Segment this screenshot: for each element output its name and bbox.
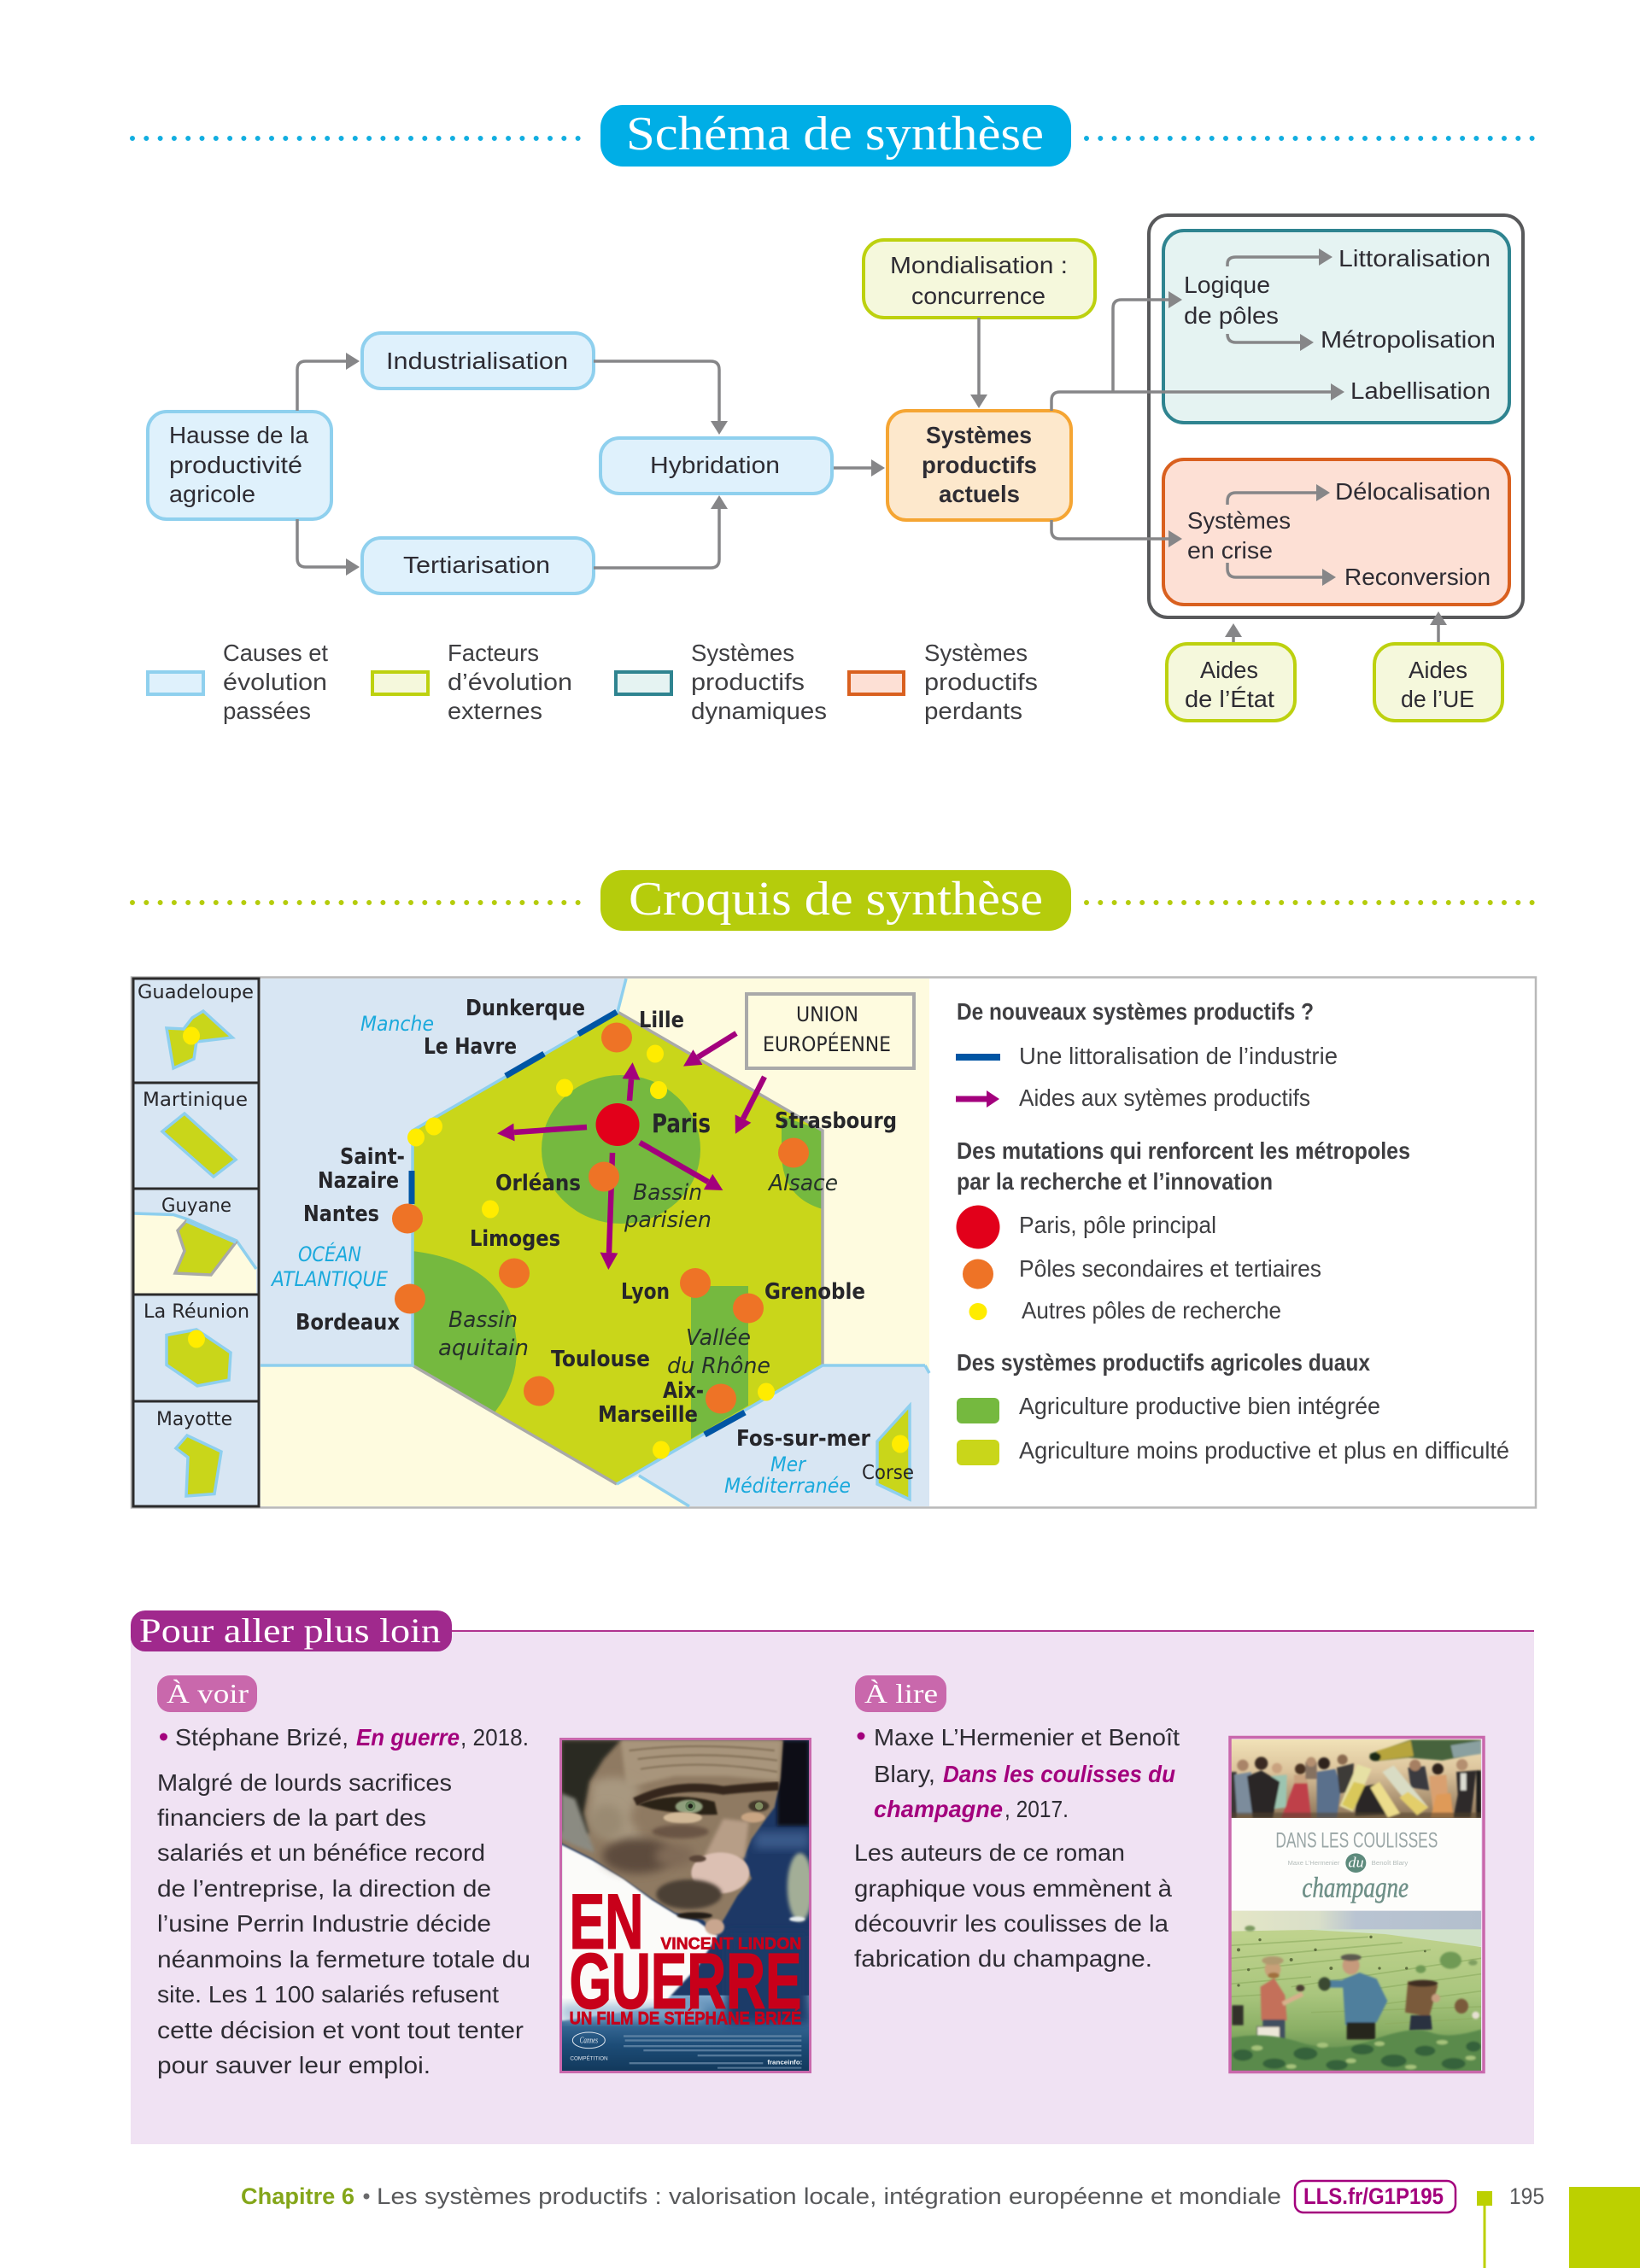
- map labels: cities: Saint-: [340, 1144, 405, 1170]
- map labels: agricultural regions: Bassin: [633, 1180, 702, 1206]
- legend item: losing systems: productifs: [924, 669, 1038, 695]
- book reference: , 2017.: [1004, 1796, 1069, 1822]
- outer frame: current systems: [1149, 215, 1523, 617]
- poster: En guerre: Cannes: [580, 2037, 598, 2046]
- legend item: losing systems: [849, 640, 1038, 724]
- heading: Schéma de synthèse: Schéma de synthèse: [626, 108, 1044, 161]
- film summary: pour sauver leur emploi.: [157, 2052, 430, 2078]
- map: France: [261, 979, 929, 1506]
- book summary: Les auteurs de ce roman: [854, 1839, 1125, 1866]
- box: Hausse de la productivité agricole: productivité: [169, 452, 302, 478]
- map labels: cities: Corse: [862, 1462, 914, 1484]
- map labels: cities: Le Havre: [424, 1034, 517, 1060]
- book summary: fabrication du champagne.: [854, 1945, 1152, 1972]
- map labels: cities: Strasbourg: [775, 1108, 897, 1134]
- poles: secondary and tertiary: [392, 1023, 809, 1414]
- map labels: agricultural regions: Vallée: [686, 1325, 751, 1351]
- inset: Martinique: Martinique: [143, 1090, 248, 1111]
- box: Systèmes productifs actuels: Systèmes: [926, 422, 1032, 448]
- box: Tertiarisation: Tertiarisation: [403, 552, 550, 578]
- arrows: right part of the flow: [979, 300, 1438, 644]
- film reference: En guerre: [356, 1724, 460, 1751]
- sea: Atlantic and Channel: [261, 979, 626, 1365]
- inset: La Réunion: [144, 1301, 249, 1386]
- inset: Mayotte: [156, 1409, 232, 1496]
- tag: À lire: [855, 1675, 946, 1712]
- map labels: cities: [296, 996, 914, 1484]
- legend item: dynamic systems: Systèmes: [691, 640, 794, 666]
- box: Union européenne: UNION: [796, 1002, 858, 1026]
- film reference: Stéphane Brizé,: [175, 1724, 348, 1751]
- panel: dynamic systems: [1163, 231, 1509, 423]
- map labels: seas: Mer: [770, 1453, 807, 1476]
- book cover: Dans les coulisses du champagne: Maxe L’Hermenier: [1288, 1859, 1340, 1867]
- sea: Mediterranean: [617, 1365, 929, 1506]
- inset: Guyane: [161, 1195, 236, 1275]
- face: [561, 1740, 783, 1934]
- box: Union européenne: [747, 994, 914, 1068]
- legend item: aid arrow: Aides aux sytèmes productifs: [1019, 1084, 1310, 1111]
- legend heading: Des systèmes productifs agricoles duaux: [957, 1349, 1370, 1376]
- legend item: external factors: Facteurs: [448, 640, 539, 666]
- footer: chapter title: Chapitre 6: [241, 2183, 354, 2209]
- legend item: Paris: [957, 1206, 1216, 1248]
- tag: À lire: À lire: [864, 1678, 938, 1709]
- footer: [241, 2181, 1640, 2268]
- book reference: [858, 1724, 1180, 1822]
- box: Aides de l'UE: [1374, 644, 1502, 721]
- box: Aides de l'UE: Aides: [1409, 657, 1467, 683]
- map labels: cities: Lyon: [621, 1279, 670, 1305]
- champagne glasses: [1339, 1764, 1372, 1812]
- map labels: cities: Dunkerque: [466, 996, 585, 1021]
- heading: Pour aller plus loin: Pour aller plus loin: [139, 1611, 441, 1650]
- poster: En guerre: VINCENT LINDON: [660, 1935, 801, 1953]
- heading: Croquis de synthèse: [132, 870, 1534, 931]
- panel: systems in crisis: Délocalisation: [1335, 478, 1491, 505]
- book cover: Dans les coulisses du champagne: du: [1348, 1855, 1364, 1871]
- hair: [561, 1740, 621, 1838]
- box: Union européenne: EUROPÉENNE: [763, 1032, 891, 1056]
- panel: dynamic systems: Métropolisation: [1321, 326, 1496, 353]
- map labels: seas: Manche: [360, 1012, 434, 1036]
- film reference: , 2018.: [460, 1724, 529, 1751]
- coastal industry lines: [412, 1012, 745, 1435]
- panel: dynamic systems: Littoralisation: [1338, 245, 1491, 272]
- panel: systems in crisis: Reconversion: [1344, 564, 1491, 590]
- book summary: [854, 1839, 1172, 1972]
- land: hexagon: [413, 1012, 823, 1484]
- map labels: agricultural regions: Alsace: [767, 1171, 838, 1196]
- agriculture: Vallée du Rhône: [691, 1286, 748, 1439]
- heading: Schéma de synthèse: [132, 105, 1534, 167]
- panel: systems in crisis: en crise: [1187, 537, 1273, 564]
- poster: En guerre: [560, 1739, 813, 2072]
- heading: Croquis de synthèse: Croquis de synthèse: [629, 873, 1043, 926]
- inset: Guadeloupe: [138, 982, 254, 1068]
- footer: corner block: [1569, 2187, 1640, 2268]
- map labels: cities: Bordeaux: [296, 1310, 400, 1336]
- map labels: seas: [270, 1012, 851, 1498]
- arrows: left part of the flow: [297, 361, 873, 568]
- footer: link badge: LLS.fr/G1P195: [1303, 2183, 1444, 2209]
- legend heading: De nouveaux systèmes productifs ?: [957, 998, 1314, 1025]
- box: Hausse de la productivité agricole: agricole: [169, 481, 255, 507]
- map labels: cities: Nantes: [303, 1201, 379, 1227]
- worker centre: [1343, 1973, 1387, 2025]
- agriculture: Alsace: [782, 1116, 823, 1209]
- box: Industrialisation: [362, 333, 594, 389]
- legend item: losing systems: perdants: [924, 698, 1022, 724]
- map labels: seas: Méditerranée: [724, 1474, 851, 1498]
- map legend: [956, 998, 1509, 1465]
- box: Industrialisation: Industrialisation: [386, 348, 568, 374]
- legend item: secondary poles: [963, 1255, 1321, 1289]
- panel: dynamic systems: Labellisation: [1350, 377, 1491, 404]
- legend item: causes: évolution: [223, 669, 327, 695]
- crowd: [1231, 1739, 1481, 1818]
- book summary: graphique vous emmènent à: [854, 1875, 1172, 1902]
- legend heading: [957, 1137, 1410, 1195]
- white collar: [561, 1844, 718, 2021]
- inset: Guadeloupe: Guadeloupe: [138, 982, 254, 1003]
- film summary: de l’entreprise, la direction de: [157, 1875, 491, 1902]
- legend item: external factors: externes: [448, 698, 542, 724]
- box: Systèmes productifs actuels: [887, 411, 1071, 520]
- film summary: [157, 1769, 530, 2078]
- map frame: [132, 977, 1536, 1508]
- brows and eyes: [635, 1786, 779, 1802]
- film summary: salariés et un bénéfice record: [157, 1839, 485, 1866]
- legend item: secondary poles: Pôles secondaires et tertiaires: [1019, 1255, 1321, 1282]
- film summary: néanmoins la fermeture totale du: [157, 1946, 530, 1973]
- poster title: EN: [570, 1879, 643, 1965]
- map labels: cities: Marseille: [598, 1402, 698, 1428]
- box: Mondialisation: [864, 240, 1095, 318]
- lower blue fade: [561, 1996, 809, 2071]
- agriculture: Bassin aquitain: [413, 1251, 517, 1412]
- legend item: external factors: d’évolution: [448, 669, 572, 695]
- inset: Mayotte: Mayotte: [156, 1409, 232, 1430]
- film summary: site. Les 1 100 salariés refusent: [157, 1981, 499, 2008]
- map labels: agricultural regions: aquitain: [438, 1336, 529, 1361]
- footer: chapter title: Les systèmes productifs : valorisation locale, intégration européenne et mondiale: [377, 2183, 1281, 2209]
- book reference: Dans les coulisses du: [943, 1761, 1175, 1787]
- film summary: financiers de la part des: [157, 1804, 426, 1831]
- book cover: Dans les coulisses du champagne: champagne: [1302, 1873, 1409, 1904]
- box: Aides de l'UE: de l’UE: [1401, 686, 1474, 712]
- legend item: causes: Causes et: [223, 640, 328, 666]
- film summary: cette décision et vont tout tenter: [157, 2017, 524, 2043]
- legend heading: Des mutations qui renforcent les métropoles: [957, 1137, 1410, 1164]
- box: Mondialisation: concurrence: [911, 283, 1046, 309]
- cheeks and nose: [602, 1838, 673, 1873]
- legend item: dynamic systems: dynamiques: [691, 698, 827, 724]
- inset: Martinique: [143, 1090, 248, 1177]
- land borders: [413, 1012, 823, 1484]
- Cannes selection: [572, 2032, 605, 2049]
- film summary: Malgré de lourds sacrifices: [157, 1769, 452, 1796]
- box: Aides de l'État: [1167, 644, 1295, 721]
- book reference: champagne: [874, 1796, 1003, 1822]
- box: Mondialisation: Mondialisation :: [890, 252, 1068, 278]
- land: Corse: [877, 1406, 910, 1499]
- map labels: agricultural regions: [438, 1171, 838, 1379]
- legend item: causes: [148, 640, 328, 724]
- book cover: Dans les coulisses du champagne: [1230, 1737, 1484, 2072]
- panel: Pour aller plus loin: [131, 1610, 1534, 2144]
- legend item: struggling agriculture: Agriculture moins productive et plus en difficulté: [1019, 1437, 1509, 1464]
- box: Hybridation: Hybridation: [650, 452, 780, 478]
- map labels: agricultural regions: du Rhône: [667, 1353, 770, 1379]
- landscape: [1231, 1911, 1481, 1932]
- panel: systems in crisis: [1163, 459, 1509, 605]
- box: Hausse de la productivité agricole: Hausse de la: [169, 422, 308, 448]
- inset: Guyane background: [134, 1213, 256, 1295]
- agriculture: Bassin parisien: [542, 1075, 700, 1224]
- map labels: agricultural regions: parisien: [624, 1207, 712, 1233]
- panel: dynamic systems: de pôles: [1184, 302, 1279, 329]
- legend item: external factors: [372, 640, 572, 724]
- poster: En guerre: COMPÉTITION: [570, 2055, 608, 2062]
- box: Hausse de la productivité agricole: [148, 412, 331, 519]
- legend heading: par la recherche et l’innovation: [957, 1168, 1273, 1195]
- legend item: Paris: Paris, pôle principal: [1019, 1212, 1216, 1238]
- box: Tertiarisation: [362, 538, 594, 593]
- panel: overseas insets: [133, 979, 259, 1506]
- box: Hybridation: [600, 438, 832, 494]
- map labels: cities: Grenoble: [764, 1279, 865, 1305]
- legend item: littoralisation: Une littoralisation de l’industrie: [1019, 1043, 1338, 1069]
- column: À voir: [157, 1675, 813, 2078]
- poles: other research poles: [407, 1045, 909, 1458]
- mouth: [656, 1879, 722, 1909]
- box: Systèmes productifs actuels: productifs: [922, 452, 1037, 478]
- arrows: aid flows: [514, 1033, 764, 1253]
- book summary: découvrir les coulisses de la: [854, 1910, 1168, 1937]
- worker left: [1232, 2005, 1244, 2025]
- foliage: [1231, 2030, 1481, 2071]
- footer: page marker: [1477, 2191, 1492, 2268]
- box: Aides de l'État: de l’État: [1185, 686, 1274, 712]
- map labels: cities: Paris: [652, 1109, 711, 1139]
- legend item: other poles: Autres pôles de recherche: [1022, 1297, 1281, 1324]
- legend: diagram colours: [148, 640, 1038, 724]
- poster: En guerre: franceinfo:: [767, 2058, 802, 2066]
- map labels: cities: Toulouse: [551, 1347, 650, 1372]
- diagram: flow of productive systems: [148, 215, 1523, 721]
- inset: La Réunion: La Réunion: [144, 1301, 249, 1323]
- map labels: cities: Nazaire: [318, 1168, 399, 1194]
- map labels: cities: Orléans: [495, 1171, 581, 1196]
- book cover: Dans les coulisses du champagne: Benoît Blary: [1372, 1859, 1409, 1867]
- map labels: cities: Fos-sur-mer: [736, 1426, 870, 1452]
- legend item: dynamic systems: [616, 640, 827, 724]
- box: Aides de l'État: Aides: [1200, 657, 1258, 683]
- column: À lire: [854, 1675, 1484, 2072]
- map labels: cities: Lille: [639, 1008, 684, 1033]
- map labels: cities: Limoges: [470, 1226, 560, 1252]
- legend item: productive agriculture: Agriculture productive bien intégrée: [1019, 1393, 1380, 1419]
- panel: systems in crisis: Systèmes: [1187, 507, 1291, 534]
- box: Systèmes productifs actuels: actuels: [939, 481, 1020, 507]
- footer: page number: 195: [1509, 2183, 1544, 2209]
- tag: À voir: À voir: [167, 1678, 249, 1709]
- tag: À voir: [157, 1675, 257, 1712]
- map labels: cities: Aix-: [663, 1378, 704, 1404]
- bottle: [1369, 1739, 1481, 1761]
- book reference: Maxe L’Hermenier et Benoît: [874, 1724, 1180, 1751]
- film summary: l’usine Perrin Industrie décide: [157, 1910, 491, 1937]
- panel: dynamic systems: Logique: [1184, 272, 1270, 298]
- map labels: agricultural regions: Bassin: [448, 1307, 518, 1333]
- legend item: causes: passées: [223, 698, 311, 724]
- legend item: dynamic systems: productifs: [691, 669, 805, 695]
- film reference: [160, 1724, 529, 1751]
- map labels: seas: OCÉAN: [298, 1242, 361, 1266]
- inset: Guyane: Guyane: [161, 1195, 231, 1217]
- map labels: seas: ATLANTIQUE: [270, 1267, 389, 1291]
- legend item: losing systems: Systèmes: [924, 640, 1028, 666]
- poles: Paris: [596, 1103, 639, 1146]
- book reference: Blary,: [874, 1761, 935, 1787]
- baskets: [1405, 1981, 1438, 2017]
